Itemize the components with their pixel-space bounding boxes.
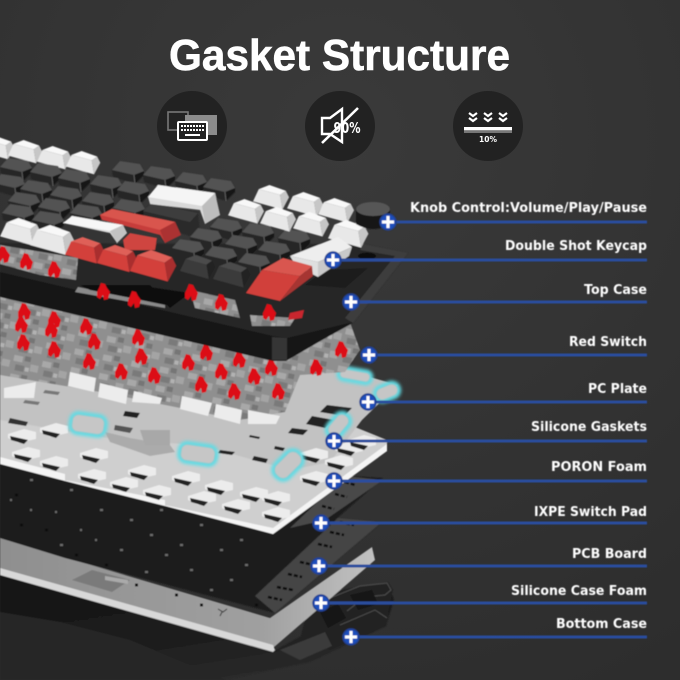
icon: pressure absorption bbox=[453, 91, 523, 161]
callout: Red Switch: Red Switch bbox=[569, 335, 647, 350]
exploded keyboard bbox=[0, 136, 647, 680]
callout: PORON Foam bbox=[326, 460, 647, 489]
icon: keyboard and windows bbox=[157, 91, 227, 161]
plate cutouts bbox=[8, 390, 376, 522]
keycaps: red cluster bbox=[65, 233, 176, 282]
keycap: large red bbox=[246, 258, 313, 301]
callout: Double Shot Keycap bbox=[325, 239, 647, 268]
keycaps: dark cluster bbox=[172, 218, 310, 288]
silicone gaskets bbox=[71, 368, 399, 481]
red switches bbox=[0, 296, 360, 424]
callout: PC Plate: PC Plate bbox=[588, 382, 647, 397]
callout: IXPE Switch Pad bbox=[313, 505, 647, 531]
callout: Double Shot Keycap: Double Shot Keycap bbox=[505, 239, 647, 254]
PCB board and IXPE switch pad bbox=[0, 455, 383, 613]
icon: 90% noise reduction bbox=[305, 91, 375, 161]
keycap: long white right bbox=[290, 237, 352, 277]
callout: Silicone Case Foam: Silicone Case Foam bbox=[511, 584, 647, 599]
keycaps: white left pair bbox=[0, 218, 74, 255]
icon: pressure absorption: 10% bbox=[479, 135, 497, 144]
callout: Bottom Case: Bottom Case bbox=[556, 617, 647, 632]
callout: Bottom Case bbox=[343, 617, 647, 645]
callout: Top Case: Top Case bbox=[584, 283, 647, 298]
PORON foam white plate bbox=[0, 400, 387, 534]
callout: Silicone Case Foam bbox=[313, 584, 647, 611]
callout: Silicone Gaskets: Silicone Gaskets bbox=[531, 420, 647, 435]
callout: IXPE Switch Pad: IXPE Switch Pad bbox=[534, 505, 647, 520]
callout: Silicone Gaskets bbox=[326, 420, 647, 449]
callout: PCB Board: PCB Board bbox=[572, 547, 647, 562]
keycaps: white cluster bbox=[228, 185, 368, 248]
keycap: long white bbox=[148, 185, 220, 224]
callout: Top Case bbox=[343, 283, 647, 310]
callout: Knob Control bbox=[380, 201, 647, 230]
PC plate bbox=[0, 365, 398, 470]
silicone case foam bbox=[0, 538, 375, 652]
keycap: long red bbox=[100, 209, 181, 243]
callout: Red Switch bbox=[361, 335, 647, 363]
callout: PC Plate bbox=[360, 382, 647, 410]
top case bbox=[0, 243, 408, 361]
knob bbox=[356, 202, 390, 229]
keycap: long white left bbox=[63, 216, 127, 243]
keycaps: dark alphanumerics bbox=[0, 158, 235, 234]
callout: Knob Control: Knob Control:Volume/Play/Pause bbox=[410, 201, 647, 216]
keycap: long dark bbox=[143, 203, 200, 236]
callout: PORON Foam: PORON Foam bbox=[551, 460, 647, 475]
callout: PCB Board bbox=[311, 547, 647, 574]
title: Gasket Structure bbox=[169, 31, 510, 80]
keycaps: upper white row bbox=[0, 136, 100, 174]
keycaps bbox=[0, 136, 390, 301]
bottom case bbox=[0, 575, 394, 680]
icon: 90% noise reduction: 90% bbox=[334, 119, 360, 137]
